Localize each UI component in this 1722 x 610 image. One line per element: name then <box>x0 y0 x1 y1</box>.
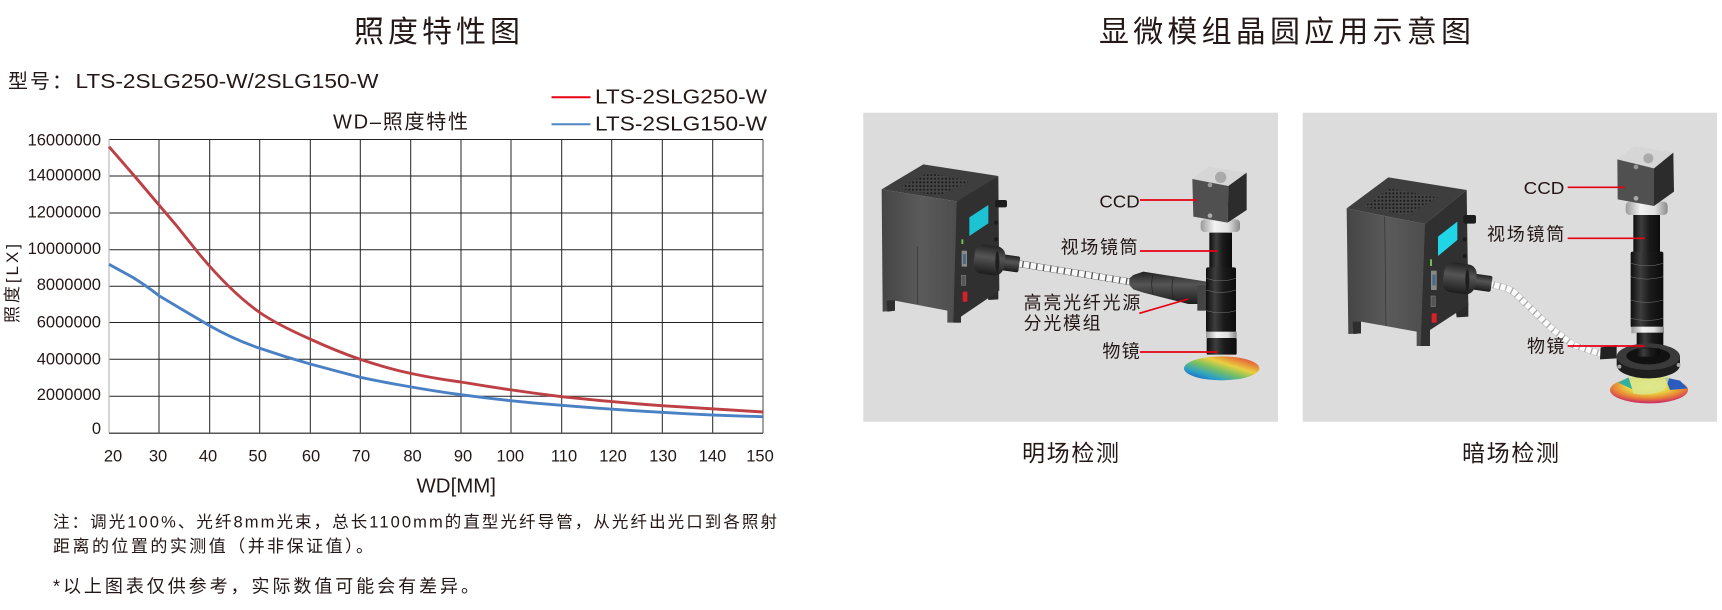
footnote <box>53 513 777 597</box>
callout lines <box>1139 200 1217 352</box>
x axis tick labels: 140 <box>699 448 726 466</box>
title: microscope module wafer application: 显微模组晶圆应用示意图 <box>1099 16 1471 49</box>
title: illuminance characteristics: 照度特性图 <box>354 16 520 49</box>
x axis tick labels: 30 <box>149 448 167 466</box>
footnote: *以上图表仅供参考，实际数值可能会有差异。 <box>53 577 479 597</box>
wafer <box>1184 356 1259 380</box>
legend <box>552 86 768 135</box>
callout labels: 视场镜筒 <box>1061 237 1138 257</box>
y axis tick labels: 16000000 <box>28 131 101 149</box>
footnote: 注：调光100%、光纤8mm光束，总长1100mm的直型光纤导管，从光纤出光口到各照射 <box>53 513 777 532</box>
y axis tick labels <box>28 131 101 438</box>
y axis tick labels: 4000000 <box>37 351 101 369</box>
legend item: 2SLG250: LTS-2SLG250-W <box>595 86 768 108</box>
chart title: WD–照度特性 <box>333 110 468 134</box>
microscope tube <box>1631 215 1664 349</box>
y axis tick labels: 6000000 <box>37 313 101 331</box>
x axis tick labels: 90 <box>454 448 472 466</box>
y axis tick labels: 14000000 <box>28 167 101 185</box>
ring light <box>1600 343 1681 378</box>
x axis tick labels: 120 <box>599 448 627 466</box>
wafer <box>1610 376 1688 403</box>
fiber cable <box>1017 263 1129 282</box>
x axis tick labels: 40 <box>199 448 217 466</box>
CCD camera <box>1192 167 1247 232</box>
callout labels: 物镜 <box>1102 341 1140 361</box>
panel: dark field <box>1303 113 1717 422</box>
y axis tick labels: 12000000 <box>28 203 101 221</box>
curve: LTS-2SLG150-W <box>109 264 763 417</box>
callout labels <box>1024 191 1140 361</box>
x axis tick labels: 150 <box>746 448 774 466</box>
curve: LTS-2SLG250-W <box>109 147 763 412</box>
caption: dark field detection: 暗场检测 <box>1462 440 1559 466</box>
x axis tick labels: 70 <box>352 448 370 466</box>
fiber cable <box>1488 283 1602 354</box>
y axis title: 照度[LX] <box>3 244 22 323</box>
callout labels: CCD <box>1524 178 1564 198</box>
y axis tick labels: 8000000 <box>37 276 101 294</box>
CCD camera <box>1617 146 1674 215</box>
illustration: light source box <box>882 164 1007 323</box>
beam splitter module <box>1129 272 1208 311</box>
line chart: WD vs illuminance <box>3 131 774 498</box>
x axis tick labels: 20 <box>104 448 122 466</box>
caption: bright field detection: 明场检测 <box>1022 440 1119 466</box>
illustration: light source box <box>1347 177 1476 346</box>
x axis tick labels: 100 <box>497 448 524 466</box>
model number heading: 型号： <box>8 70 72 93</box>
model number heading: LTS-2SLG250-W/2SLG150-W <box>76 70 379 93</box>
legend item: 2SLG150: LTS-2SLG150-W <box>595 112 768 135</box>
x axis tick labels: 80 <box>403 448 422 466</box>
callout labels: CCD <box>1099 191 1140 211</box>
callout labels <box>1487 178 1564 356</box>
x axis title: WD[MM] <box>416 476 496 498</box>
callout labels: 视场镜筒 <box>1487 225 1564 245</box>
callout labels: 物镜 <box>1527 336 1564 356</box>
y axis tick labels: 2000000 <box>37 386 101 404</box>
x axis tick labels: 60 <box>302 448 320 466</box>
y axis tick labels: 10000000 <box>28 240 101 258</box>
callout labels: 分光模组 <box>1024 313 1101 333</box>
x axis tick labels <box>104 448 774 466</box>
callout lines <box>1568 187 1645 346</box>
fiber connector <box>1441 261 1493 295</box>
fiber connector <box>972 243 1020 277</box>
microscope tube <box>1206 233 1237 355</box>
callout labels: 高亮光纤光源 <box>1024 293 1140 313</box>
x axis tick labels: 50 <box>249 448 267 466</box>
x axis tick labels: 110 <box>551 448 577 466</box>
panel: bright field <box>863 113 1278 422</box>
footnote: 距离的位置的实测值（并非保证值）。 <box>53 537 373 556</box>
x axis tick labels: 130 <box>649 448 677 466</box>
y axis tick labels: 0 <box>92 420 101 438</box>
